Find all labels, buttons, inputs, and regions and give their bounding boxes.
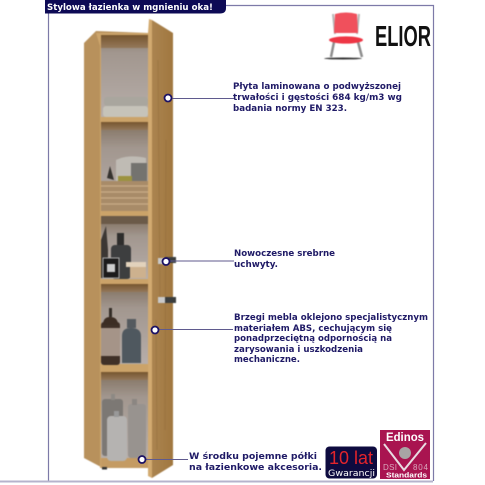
header banner: Stylowa łazienka w mgnieniu oka! (47, 3, 213, 13)
foot (102, 467, 107, 470)
callout: handles: Nowoczesne srebrne (234, 248, 335, 259)
callout: shelves: na łazienkowe akcesoria. (189, 462, 322, 473)
callout: ABS edges: materiałem ABS, cechującym się (234, 323, 392, 334)
cabinet (84, 19, 176, 478)
callout: laminated board: trwałości i gęstości 684 kg/m3 wg (233, 92, 402, 103)
callout: ABS edges: ponadprzeciętną odpornością na (234, 333, 392, 344)
callout: handles (162, 248, 335, 270)
top shelf underside (101, 35, 148, 48)
badge: Edinos standards: Edinos (386, 430, 424, 444)
callout: laminated board: badania normy EN 323. (233, 103, 347, 114)
badge: Edinos standards: 804 (413, 463, 429, 472)
marker dot (138, 456, 146, 463)
marker dot (164, 94, 172, 102)
badge: Edinos standards (380, 430, 430, 480)
badge: Edinos standards: Standards (386, 470, 427, 480)
callout: laminated board (164, 81, 402, 114)
icon: red chair (324, 12, 363, 60)
callout: ABS edges: mechaniczne. (234, 354, 300, 365)
glass jars on bottom shelf (102, 394, 146, 461)
door (148, 19, 173, 478)
handles (158, 257, 176, 303)
badge: 10 years warranty: 10 lat (329, 448, 373, 468)
wicker basket and items (101, 156, 148, 211)
badge: 10 years warranty (326, 446, 377, 479)
callout: ABS edges: Brzegi mebla oklejono specjalistycznym (234, 312, 428, 323)
logo wordmark: ELIOR (375, 21, 431, 53)
callout: ABS edges (152, 312, 428, 365)
badge: Edinos standards: DSI (383, 463, 397, 472)
marker dot (152, 326, 158, 334)
marker dot (162, 258, 170, 265)
callout: ABS edges: zarysowania i uszkodzenia (234, 344, 363, 355)
cabinet top and side (84, 31, 149, 467)
callout: shelves (138, 451, 322, 473)
callout: laminated board: Płyta laminowana o podwyższonej (233, 81, 401, 92)
bottles on third shelf (101, 226, 146, 279)
callout: shelves: W środku pojemne półki (189, 451, 317, 462)
bottles on fourth shelf (101, 308, 141, 365)
header banner (45, 0, 226, 14)
badge: 10 years warranty: Gwarancji (328, 469, 375, 479)
shelves (101, 117, 148, 468)
logo: Elior (324, 12, 431, 60)
callout: handles: uchwyty. (234, 259, 278, 270)
folded towels (103, 97, 148, 117)
cabinet interior back panels (101, 35, 148, 458)
